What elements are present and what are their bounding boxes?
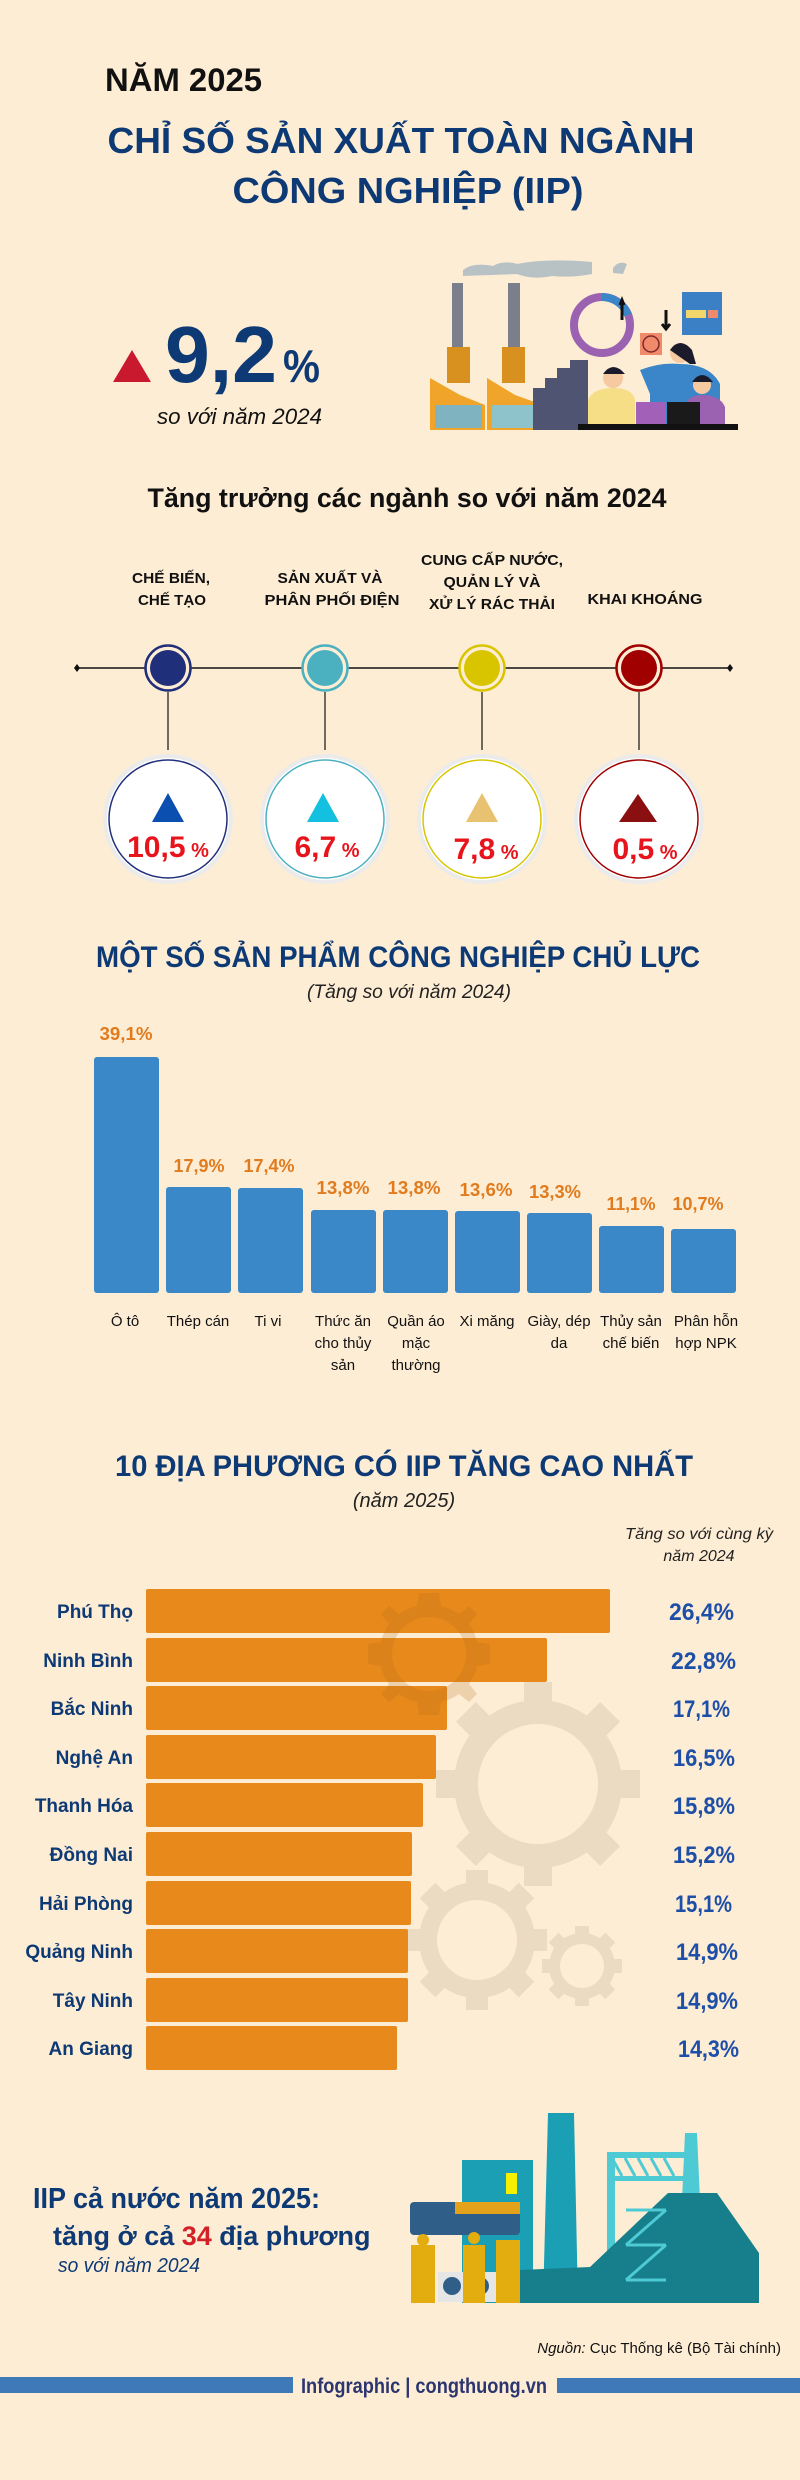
bar chart: key products: 13,8% xyxy=(316,1178,370,1198)
growth circle: khai khoang: 0,5 % xyxy=(612,833,678,866)
footer xyxy=(0,2375,800,2398)
icon: red up triangle xyxy=(113,350,151,382)
bar chart: key products: sản xyxy=(331,1357,355,1374)
sector labels: SẢN XUẤT VÀ xyxy=(278,570,383,587)
footer: Infographic | congthuong.vn xyxy=(301,2375,547,2398)
legend note xyxy=(625,1526,774,1565)
horizontal bar chart: provinces: 14,9% xyxy=(676,1988,738,2015)
callout: 34 provinces xyxy=(33,2183,371,2277)
horizontal bar chart: provinces: 14,9% xyxy=(676,1939,738,1966)
bar chart: key products: 13,6% xyxy=(460,1180,512,1200)
bar chart: key products: Ti vi xyxy=(255,1313,281,1330)
horizontal bar chart: provinces: 16,5% xyxy=(673,1745,735,1772)
headline stat: 9,2%: so với năm 2024 xyxy=(157,404,322,429)
growth circle: dien: 6,7 % xyxy=(294,831,360,864)
bar chart: key products: Thép cán xyxy=(167,1313,229,1330)
illustration: factory and office workers xyxy=(430,260,738,430)
section heading: top 10 provinces: 10 ĐỊA PHƯƠNG CÓ IIP TĂNG CAO NHẤT xyxy=(115,1449,693,1483)
bar chart: key products: 13,8% xyxy=(388,1178,440,1198)
kicker: year: NĂM 2025 xyxy=(105,62,262,98)
bar chart: key products: 17,4% xyxy=(244,1156,294,1176)
bar chart: key products: Quần áo xyxy=(387,1313,445,1330)
growth circle: nuoc: 7,8 % xyxy=(453,833,519,866)
growth circle: dien xyxy=(260,754,390,884)
bar chart: key products: Giày, dép xyxy=(527,1313,591,1330)
horizontal bar chart: provinces: Hải Phòng xyxy=(39,1894,133,1915)
horizontal bar chart: provinces: An Giang xyxy=(49,2039,133,2060)
sector labels: CHẾ TẠO xyxy=(138,592,206,609)
bar chart: key products: Ô tô xyxy=(111,1313,139,1330)
bar chart: key products: Thức ăn xyxy=(315,1313,371,1330)
headline stat: 9,2%: 9,2 xyxy=(165,310,277,399)
sector labels: QUẢN LÝ VÀ xyxy=(444,573,541,591)
section heading: key products: MỘT SỐ SẢN PHẨM CÔNG NGHIỆP CHỦ LỰC xyxy=(96,940,700,974)
legend note: năm 2024 xyxy=(663,1548,735,1565)
sector labels xyxy=(132,551,702,613)
bar chart: key products: mặc xyxy=(402,1335,431,1352)
horizontal bar chart: provinces: Ninh Bình xyxy=(43,1651,133,1672)
horizontal bar chart: provinces: Quảng Ninh xyxy=(25,1942,133,1963)
bar chart: key products: chế biến xyxy=(603,1335,659,1352)
horizontal bar chart: provinces: 15,2% xyxy=(673,1842,735,1869)
bar chart: key products: Phân hỗn xyxy=(674,1313,738,1330)
section heading: sector growth: Tăng trưởng các ngành so với năm 2024 xyxy=(148,483,666,513)
callout: 34 provinces: tăng ở cả 34 địa phương xyxy=(53,2221,371,2251)
sector labels: CHẾ BIẾN, xyxy=(132,570,210,587)
horizontal bar chart: provinces: 22,8% xyxy=(671,1648,736,1675)
horizontal bar chart: provinces: Phú Thọ xyxy=(57,1602,133,1623)
sector labels: XỬ LÝ RÁC THẢI xyxy=(429,595,555,613)
growth circle: khai khoang xyxy=(574,754,704,884)
bar chart: key products: da xyxy=(551,1335,568,1352)
bar chart: key products: Thủy sản xyxy=(600,1313,662,1330)
illustration: industrial workers xyxy=(410,2113,759,2303)
growth circle: nuoc xyxy=(417,754,547,884)
sector labels: PHÂN PHỐI ĐIỆN xyxy=(264,591,400,609)
bar chart: key products: Xi măng xyxy=(459,1313,515,1330)
horizontal bar chart: provinces: 15,1% xyxy=(675,1891,732,1918)
headline stat: 9,2%: % xyxy=(283,340,320,392)
section heading: top 10 provinces: (năm 2025) xyxy=(353,1490,455,1512)
growth circle: che bien che tao xyxy=(103,754,233,884)
bar chart: key products: 10,7% xyxy=(672,1194,724,1214)
section heading: key products xyxy=(96,940,700,1003)
horizontal bar chart: provinces: 14,3% xyxy=(678,2036,739,2063)
callout: 34 provinces: so với năm 2024 xyxy=(58,2255,200,2277)
decorative gears xyxy=(407,1682,640,2010)
section heading: key products: (Tăng so với năm 2024) xyxy=(307,982,511,1003)
source note: Nguồn: Cục Thống kê (Bộ Tài chính) xyxy=(537,2340,781,2357)
horizontal bar chart: provinces: 15,8% xyxy=(673,1793,735,1820)
timeline xyxy=(74,646,733,750)
sector labels: KHAI KHOÁNG xyxy=(588,591,702,608)
horizontal bar chart: provinces xyxy=(25,1589,739,2070)
bar chart: key products: cho thủy xyxy=(315,1335,372,1352)
bar chart: key products: 39,1% xyxy=(100,1024,152,1044)
sector labels: CUNG CẤP NƯỚC, xyxy=(421,551,563,569)
title xyxy=(108,119,694,211)
gear overlay on bars xyxy=(368,1593,490,1715)
bar chart: key products: 17,9% xyxy=(174,1156,224,1176)
horizontal bar chart: provinces: Đồng Nai xyxy=(50,1845,133,1866)
horizontal bar chart: provinces: Bắc Ninh xyxy=(51,1698,133,1720)
headline stat: 9,2% xyxy=(113,310,322,429)
bar chart: key products: 11,1% xyxy=(606,1194,656,1214)
horizontal bar chart: provinces: Tây Ninh xyxy=(53,1991,133,2012)
section heading: top 10 provinces xyxy=(115,1449,693,1512)
horizontal bar chart: provinces: Nghệ An xyxy=(56,1748,133,1769)
legend note: Tăng so với cùng kỳ xyxy=(625,1526,774,1543)
horizontal bar chart: provinces: Thanh Hóa xyxy=(35,1796,133,1817)
growth circle: che bien che tao: 10,5 % xyxy=(127,831,209,864)
horizontal bar chart: provinces: 26,4% xyxy=(669,1599,734,1626)
title: CÔNG NGHIỆP (IIP) xyxy=(232,169,584,211)
bar chart: key products xyxy=(94,1024,738,1374)
bar chart: key products: hợp NPK xyxy=(675,1335,737,1352)
bar chart: key products: 13,3% xyxy=(529,1182,581,1202)
callout: 34 provinces: IIP cả nước năm 2025: xyxy=(33,2183,320,2215)
title: CHỈ SỐ SẢN XUẤT TOÀN NGÀNH xyxy=(108,119,694,161)
horizontal bar chart: provinces: 17,1% xyxy=(673,1696,730,1723)
bar chart: key products: thường xyxy=(391,1357,441,1374)
